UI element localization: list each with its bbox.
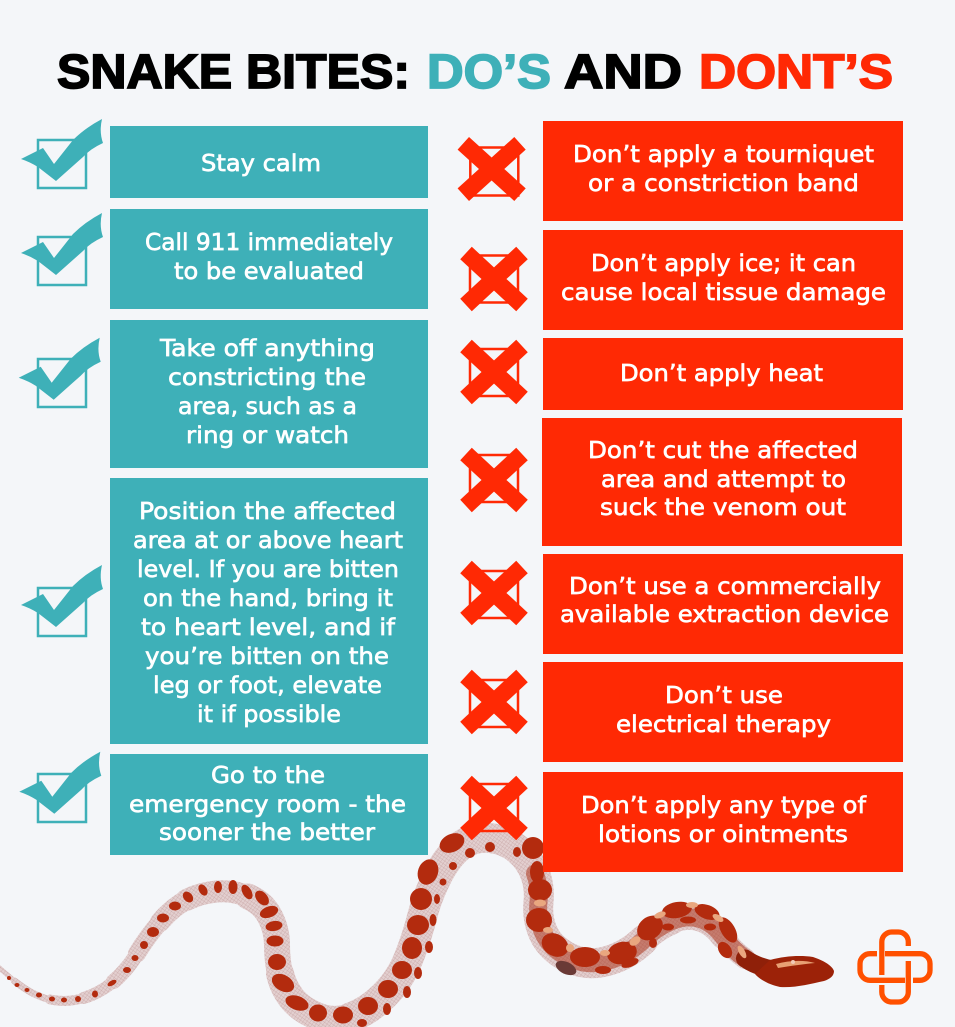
panel: do 3: Take off anything [159, 336, 375, 362]
panel: dont 4: suck the venom out [600, 495, 846, 521]
snake illustration [0, 829, 834, 1027]
heading: DONT’S [699, 46, 893, 99]
panel: dont 7: lotions or ointments [598, 822, 848, 848]
panel: do 4: on the hand, bring it [143, 586, 393, 612]
snake underbody shading [535, 874, 745, 963]
panel: dont 4: area and attempt to [601, 467, 846, 493]
panel: do 5: sooner the better [159, 820, 376, 846]
icon: checkmark 3 [19, 338, 101, 407]
panel: dont 5: available extraction device [560, 602, 889, 628]
panel: do 3: ring or watch [186, 423, 349, 449]
icon: checkmark 5 [19, 752, 101, 822]
panel: dont 6 [543, 662, 903, 762]
heading: AND [564, 46, 682, 99]
panel: do 1: Stay calm [201, 151, 321, 177]
panel: dont 2 [543, 230, 903, 330]
icon: brand logo [860, 932, 930, 1002]
icon: cross 7 [466, 782, 522, 834]
panel: dont 2: cause local tissue damage [561, 280, 886, 306]
panel: do 4 [110, 478, 428, 744]
panel: dont 7 [543, 772, 903, 872]
panel: do 3: area, such as a [178, 394, 357, 420]
heading [57, 46, 893, 99]
icon: checkmark 1 [21, 119, 103, 188]
heading: SNAKE BITES: [57, 46, 410, 99]
panel: do 5: Go to the [211, 763, 325, 789]
icon: cross 3 [466, 346, 522, 398]
panel: do 4: Position the affected [139, 499, 396, 525]
panel: do 3 [110, 320, 428, 468]
panel: do 4: it if possible [197, 702, 341, 728]
panel: dont 6: electrical therapy [616, 712, 831, 738]
panel: do 4: area at or above heart [133, 528, 403, 554]
panel: do 2: to be evaluated [174, 259, 364, 285]
panel: do 2 [110, 209, 428, 309]
panel: do 5: emergency room - the [129, 792, 406, 818]
panel: dont 6: Don’t use [665, 683, 783, 709]
panel: dont 4 [542, 418, 902, 546]
panel: do 3: constricting the [168, 365, 366, 391]
snake neck [745, 958, 800, 971]
panel: dont 1: Don’t apply a tourniquet [573, 142, 874, 168]
snake orange spots [534, 900, 748, 960]
icon: cross 5 [466, 567, 522, 619]
panel: do 5 [110, 754, 428, 855]
panel: do 4: you’re bitten on the [145, 644, 389, 670]
panel: do 4: level. If you are bitten [137, 557, 399, 583]
heading: DO’S [427, 46, 551, 99]
snake head [755, 956, 834, 987]
icon: cross 4 [466, 454, 522, 506]
icon: cross 2 [466, 253, 522, 305]
icon: cross 6 [466, 676, 522, 728]
panel: dont 4: Don’t cut the affected [588, 438, 858, 464]
panel: do 4: leg or foot, elevate [153, 673, 382, 699]
panel: dont 7: Don’t apply any type of [581, 793, 867, 819]
panel: dont 1 [543, 121, 903, 221]
panel: dont 5 [543, 554, 903, 654]
panel: dont 1: or a constriction band [588, 171, 859, 197]
icon: checkmark 4 [21, 565, 103, 636]
snake blotches [7, 829, 741, 1027]
panel: dont 3 [543, 338, 903, 410]
icon: cross 1 [463, 143, 520, 196]
panel: dont 2: Don’t apply ice; it can [591, 251, 856, 277]
panel: do 1 [110, 126, 428, 198]
icon: checkmark 2 [21, 213, 103, 285]
panel: dont 3: Don’t apply heat [620, 361, 823, 387]
panel: dont 5: Don’t use a commercially [569, 574, 881, 600]
panel: do 2: Call 911 immediately [145, 230, 393, 256]
panel: do 4: to heart level, and if [141, 615, 396, 641]
